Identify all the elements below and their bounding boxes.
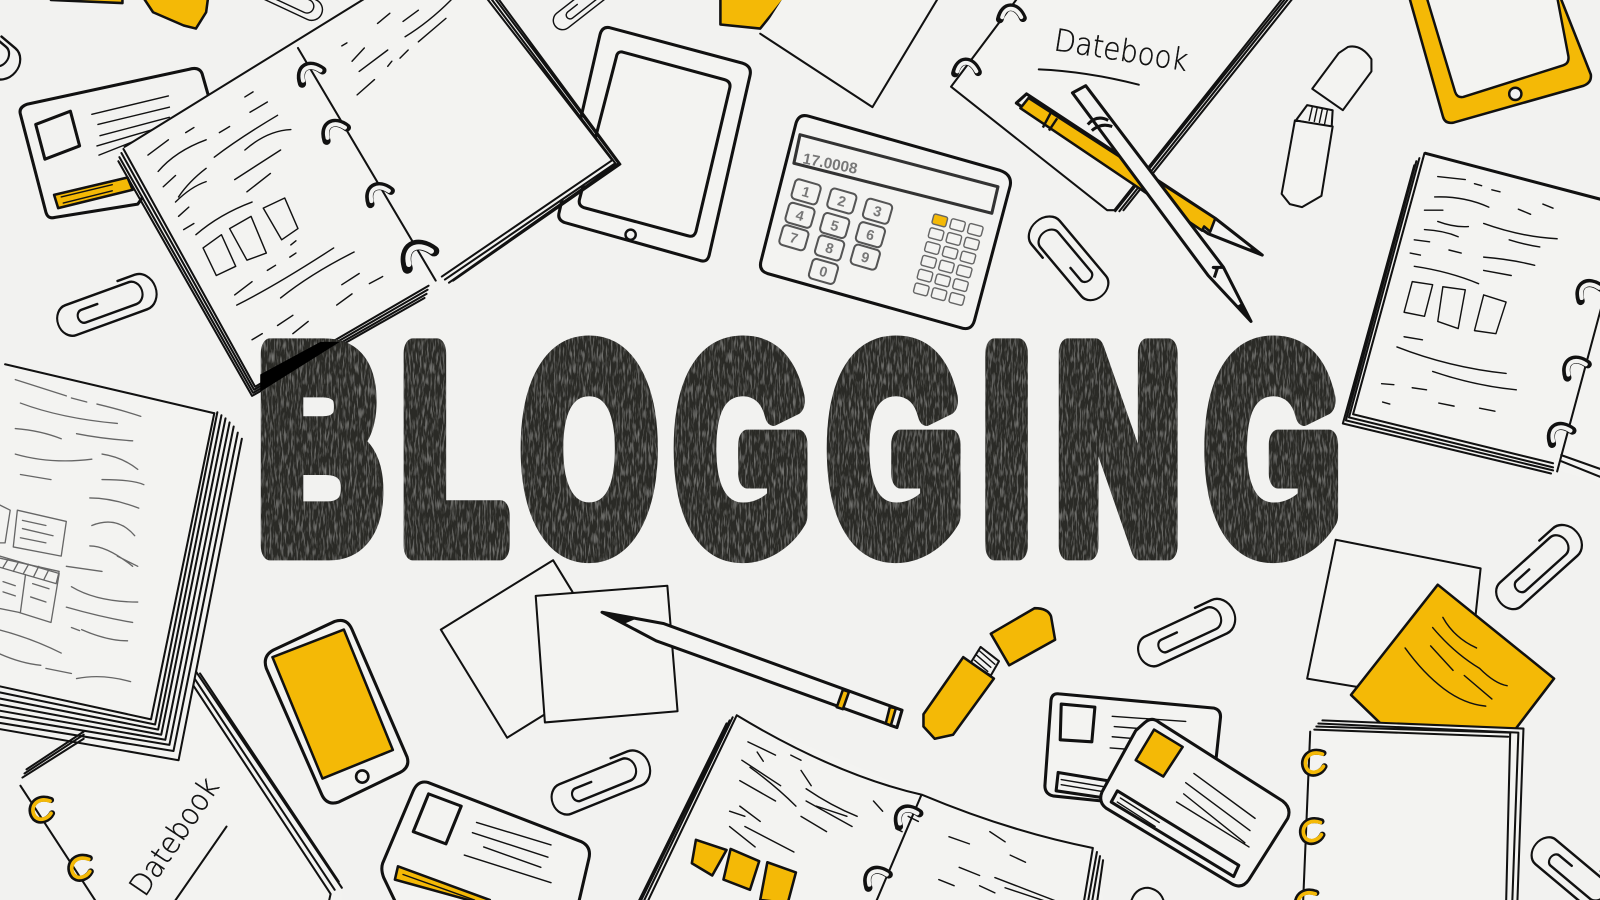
calculator keys: 6 [864, 227, 876, 245]
icon: top-left yellow USB cap [49, 0, 208, 29]
calculator keys [778, 178, 893, 285]
panel: open notebook, right side [1343, 153, 1600, 485]
icon: paperclip beside USB [1131, 594, 1241, 671]
icon: tablet, centre top [559, 27, 750, 261]
title: BLOGGING [258, 293, 1340, 606]
icon: paperclip bottom centre-left [545, 746, 655, 819]
icon: white USB stick [1282, 46, 1371, 207]
icon: paperclip top-right of notes [1487, 518, 1589, 615]
calculator keys: 1 [800, 184, 812, 202]
panel: open spiral notebook, top-left [118, 0, 620, 396]
book corner overlapping the title [260, 342, 340, 392]
notebook writing [148, 0, 451, 340]
calculator keys: 5 [828, 218, 840, 235]
notebook rings [301, 66, 322, 84]
bottom notebook writing [730, 742, 1061, 900]
icon: yellow USB stick [923, 608, 1055, 739]
calculator keys: 7 [788, 230, 800, 248]
panel: open notebook, bottom centre [638, 715, 1104, 900]
icon: sticky notes, centre bottom [441, 560, 678, 738]
left book writing [0, 380, 144, 682]
panel: stacked open book, left side [0, 364, 243, 760]
panel: datebook, bottom-left [20, 671, 342, 900]
calculator display value: 17.0008 [801, 151, 859, 178]
datebook label: Datebook [1052, 23, 1190, 79]
calculator keys: 8 [823, 240, 835, 258]
icon: paperclip fragment bottom [1131, 888, 1164, 900]
calculator keys: 2 [836, 193, 848, 211]
icon: sticky note top centre with yellow fragment [720, 0, 939, 107]
right notebook rings [1579, 283, 1600, 301]
icon: yellow phone [265, 620, 408, 803]
icon: ID card, front with yellow square [1101, 719, 1289, 886]
icon: centre pencil [602, 612, 902, 728]
icon: yellow tablet top-right [1409, 0, 1591, 123]
icon: ID card, bottom centre-left [382, 782, 589, 900]
icon: calculator [760, 116, 1010, 329]
bottom datebook label: Datebook [123, 771, 226, 900]
paperclip mid-left [51, 270, 162, 340]
icon: paperclip bottom-right corner [1526, 828, 1600, 900]
calculator keys: 0 [817, 264, 829, 281]
icon: paperclip top fragment [251, 0, 326, 24]
calculator keys: 4 [794, 208, 806, 225]
calculator small key grid [913, 214, 983, 306]
icon: ID card, back [1045, 694, 1221, 801]
panel: notebook, bottom-right [1297, 720, 1523, 900]
icon: white pencil [1072, 86, 1251, 321]
icon: yellow pencil [1016, 94, 1262, 256]
icon: paperclip top-left [0, 0, 27, 86]
icon: ID card behind open book [20, 68, 210, 218]
right notebook writing [1382, 177, 1557, 411]
calculator keys: 9 [859, 249, 871, 267]
panel: datebook top centre [951, 0, 1294, 211]
icon: blank and yellow sticky notes, right [1307, 540, 1554, 731]
icon: paperclip under datebook [1022, 210, 1114, 309]
calculator keys: 3 [871, 203, 883, 221]
icon: paperclip top centre fragment [548, 0, 618, 33]
